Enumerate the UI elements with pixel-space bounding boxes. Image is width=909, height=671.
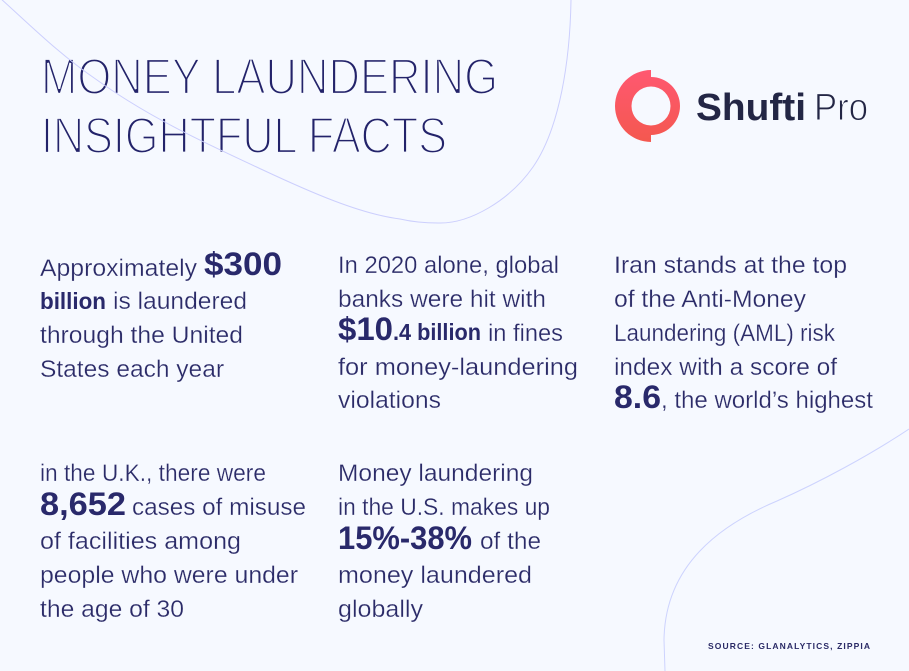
title	[41, 48, 498, 164]
fact: Iran AML index 8.6: , the world’s highest	[661, 387, 873, 414]
logo: Shufti Pro: Pro	[814, 87, 868, 129]
logo wordmark: Shufti	[696, 87, 806, 129]
fact: $300 billion: through the United	[40, 322, 243, 349]
fact: 8,652 cases in the U.K.: of facilities among	[40, 528, 241, 555]
fact: 8,652 cases in the U.K.: cases of misuse	[132, 494, 306, 521]
fact: $300 billion: States each year	[40, 356, 224, 383]
fact: $300 billion: $300	[204, 246, 282, 282]
fact: Iran AML index 8.6: Iran stands at the top	[614, 252, 847, 279]
source note: SOURCE: GLANALYTICS, ZIPPIA	[708, 641, 870, 651]
fact: 15%-38% of money laundered: Money laundering	[338, 460, 533, 487]
fact: 8,652 cases in the U.K.: 8,652	[40, 486, 126, 522]
fact: 15%-38% of money laundered: 15%-38%	[338, 520, 472, 556]
fact: 8,652 cases in the U.K.: the age of 30	[40, 596, 184, 623]
fact: Iran AML index 8.6: 8.6	[614, 379, 661, 415]
fact: Iran AML index 8.6	[614, 252, 873, 415]
fact: $10.4 billion: violations	[338, 387, 441, 414]
fact: Iran AML index 8.6: Laundering (AML) risk	[614, 320, 836, 347]
fact: $10.4 billion: $10	[338, 311, 393, 347]
icon: red ring	[615, 70, 680, 142]
fact: 15%-38% of money laundered: of the	[480, 528, 541, 555]
title: MONEY LAUNDERING	[41, 48, 498, 105]
fact: $10.4 billion: in fines	[488, 320, 563, 347]
fact: 15%-38% of money laundered: money laundered	[338, 562, 532, 589]
title: INSIGHTFUL FACTS	[41, 107, 447, 164]
fact: $300 billion	[40, 246, 282, 383]
fact: Iran AML index 8.6: index with a score of	[614, 354, 837, 381]
decorative curve: top	[0, 0, 571, 223]
fact: $300 billion: billion	[40, 288, 106, 314]
fact: Iran AML index 8.6: of the Anti-Money	[614, 286, 806, 313]
fact: 15%-38% of money laundered: in the U.S. makes up	[338, 494, 550, 521]
logo: Shufti Pro	[615, 70, 868, 142]
fact: $10.4 billion: In 2020 alone, global	[338, 252, 559, 279]
fact: $10.4 billion: for money-laundering	[338, 354, 578, 381]
fact: $10.4 billion: banks were hit with	[338, 286, 546, 313]
fact: $10.4 billion: .4 billion	[393, 319, 481, 345]
fact: 8,652 cases in the U.K.	[40, 460, 306, 623]
fact: 8,652 cases in the U.K.: people who were under	[40, 562, 298, 589]
fact: $10.4 billion	[338, 252, 578, 414]
fact: 15%-38% of money laundered	[338, 460, 550, 623]
fact: 8,652 cases in the U.K.: in the U.K., there were	[40, 460, 266, 487]
fact: $300 billion: is laundered	[113, 288, 247, 315]
decorative curve: bottom right	[664, 429, 909, 671]
fact: 15%-38% of money laundered: globally	[338, 596, 423, 623]
fact: $300 billion: Approximately	[40, 255, 197, 282]
